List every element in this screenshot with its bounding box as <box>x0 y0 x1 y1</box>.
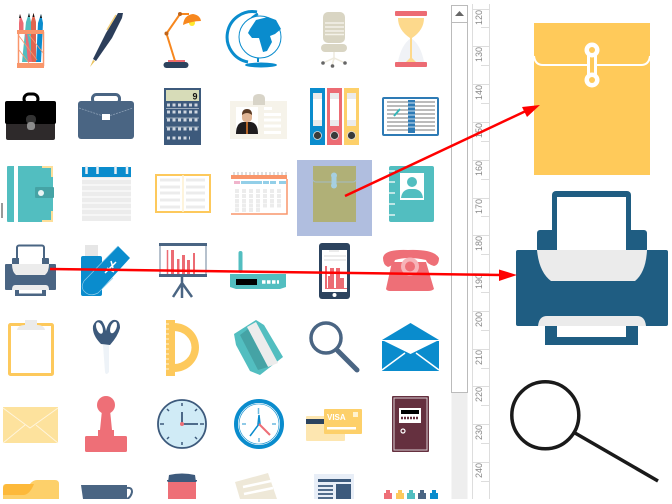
icon: blue wall clock <box>236 401 282 447</box>
icon: teal wallet notebook <box>2 166 54 222</box>
vertical ruler: 200 <box>474 312 484 327</box>
icon library panel <box>2 11 439 499</box>
icon: small printer <box>5 246 56 296</box>
icon: protractor <box>166 320 199 376</box>
icon: paper sheets <box>235 473 277 499</box>
icon: USB drive <box>81 245 130 296</box>
icon: ID badge <box>230 94 287 139</box>
vertical ruler: 210 <box>474 350 484 365</box>
vertical ruler: 240 <box>474 463 484 478</box>
icon: pencil sharpener <box>234 320 283 375</box>
icon: credit cards <box>306 409 362 441</box>
arrow: printer to large printer <box>50 269 517 281</box>
icon: hourglass <box>395 11 427 67</box>
icon: smartphone <box>319 243 350 299</box>
icon: rubber stamp <box>85 396 127 452</box>
icon: wall clock <box>158 400 206 448</box>
icon: credit cards: VISA <box>327 413 346 422</box>
vertical ruler: 190 <box>474 274 484 289</box>
icon: desk lamp <box>164 12 201 68</box>
icon: office chair <box>321 12 347 68</box>
icon: wifi router <box>230 251 286 289</box>
icon: coffee mug <box>81 485 132 499</box>
icon: calculator: 9 <box>192 92 198 102</box>
vertical ruler: 220 <box>474 387 484 402</box>
scrollbar <box>452 6 468 499</box>
large envelope <box>534 23 650 175</box>
icon: yellow folder <box>3 480 59 499</box>
icon: rotary telephone <box>383 250 439 291</box>
vertical ruler: 170 <box>474 199 484 214</box>
icon: small magnifier <box>311 323 357 370</box>
vertical ruler: 120 <box>474 10 484 25</box>
icon: wall safe <box>392 396 429 452</box>
icon: clipboard <box>10 320 52 374</box>
icon: calculator <box>164 88 201 145</box>
icon: open book <box>156 175 210 212</box>
icon: contact book <box>389 166 434 222</box>
large printer <box>516 191 668 345</box>
highlighted selected envelope <box>297 160 372 236</box>
icon: pencil holder <box>17 13 44 68</box>
icon: push pins <box>384 490 438 499</box>
icon: open planner <box>383 98 438 135</box>
vertical ruler: 180 <box>474 236 484 251</box>
vertical ruler: 150 <box>474 123 484 138</box>
arrow: envelope to large envelope <box>345 105 540 196</box>
vertical ruler: 230 <box>474 425 484 440</box>
icon: black briefcase <box>5 94 56 140</box>
large magnifier outline <box>512 382 658 481</box>
vertical ruler: 140 <box>474 85 484 100</box>
icon: newspaper <box>314 474 354 499</box>
icon: spiral notepad <box>82 166 131 221</box>
icon: blue briefcase <box>78 94 134 139</box>
icon: wall calendar <box>231 174 287 214</box>
icon: paper coffee cup <box>167 474 197 499</box>
icon: globe <box>227 12 281 68</box>
icon: cream envelope <box>3 407 58 443</box>
icon: scissors <box>93 320 120 374</box>
icon: ring binders <box>310 88 359 145</box>
vertical ruler: 130 <box>474 47 484 62</box>
vertical ruler: 160 <box>474 161 484 176</box>
icon: fountain pen <box>90 13 123 67</box>
icon: presentation board <box>159 243 207 298</box>
icon: open blue envelope <box>382 323 439 371</box>
vertical ruler <box>472 4 490 499</box>
